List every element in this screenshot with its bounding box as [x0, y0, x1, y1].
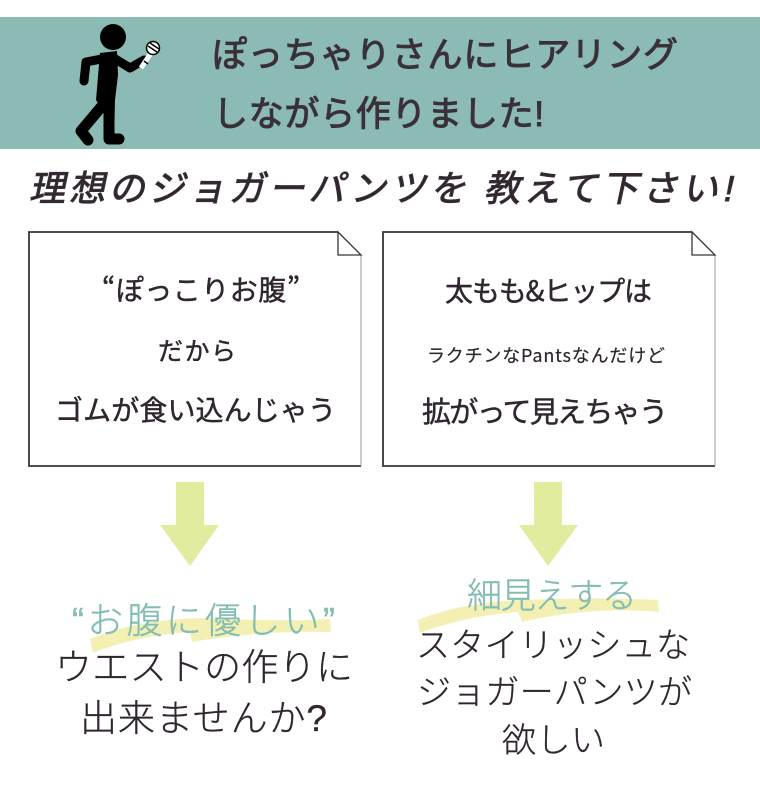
- note text line 3: ゴムが食い込んじゃう: [55, 389, 336, 429]
- callout body line 3: 欲しい: [502, 722, 605, 760]
- callout heading: “お腹に優しい”: [72, 600, 335, 641]
- heading line 1: ぽっちゃりさんにヒアリング: [212, 36, 678, 75]
- callout: right: [416, 577, 692, 760]
- arrow: left: [160, 482, 219, 566]
- header band: [0, 17, 760, 149]
- note text line 2: ラクチンなPantsなんだけど: [427, 342, 665, 368]
- arrow: right: [519, 482, 578, 566]
- note text line 1: “ぽっこりお腹”: [102, 269, 300, 309]
- callout body line 2: ジョガーパンツが: [417, 674, 692, 712]
- heading line 2: しながら作りました!: [213, 95, 544, 134]
- icon: person with microphone: [81, 24, 160, 141]
- note text line 3: 拡がって見えちゃう: [422, 389, 668, 431]
- callout heading: 細見えする: [467, 577, 637, 616]
- subheading: 理想のジョガーパンツを 教えて下さい!: [27, 168, 739, 209]
- callout: left: [55, 600, 353, 739]
- callout body line 1: ウエストの作りに: [55, 647, 353, 688]
- panel: right note: [383, 232, 715, 466]
- callout body line 2: 出来ませんか?: [80, 698, 327, 739]
- panel: left note: [29, 232, 361, 466]
- note text line 2: だから: [158, 332, 236, 368]
- highlight: right: [418, 598, 659, 633]
- callout body line 1: スタイリッシュな: [416, 627, 690, 665]
- highlight: left: [90, 618, 331, 653]
- note text line 1: 太もも&ヒップは: [445, 270, 652, 310]
